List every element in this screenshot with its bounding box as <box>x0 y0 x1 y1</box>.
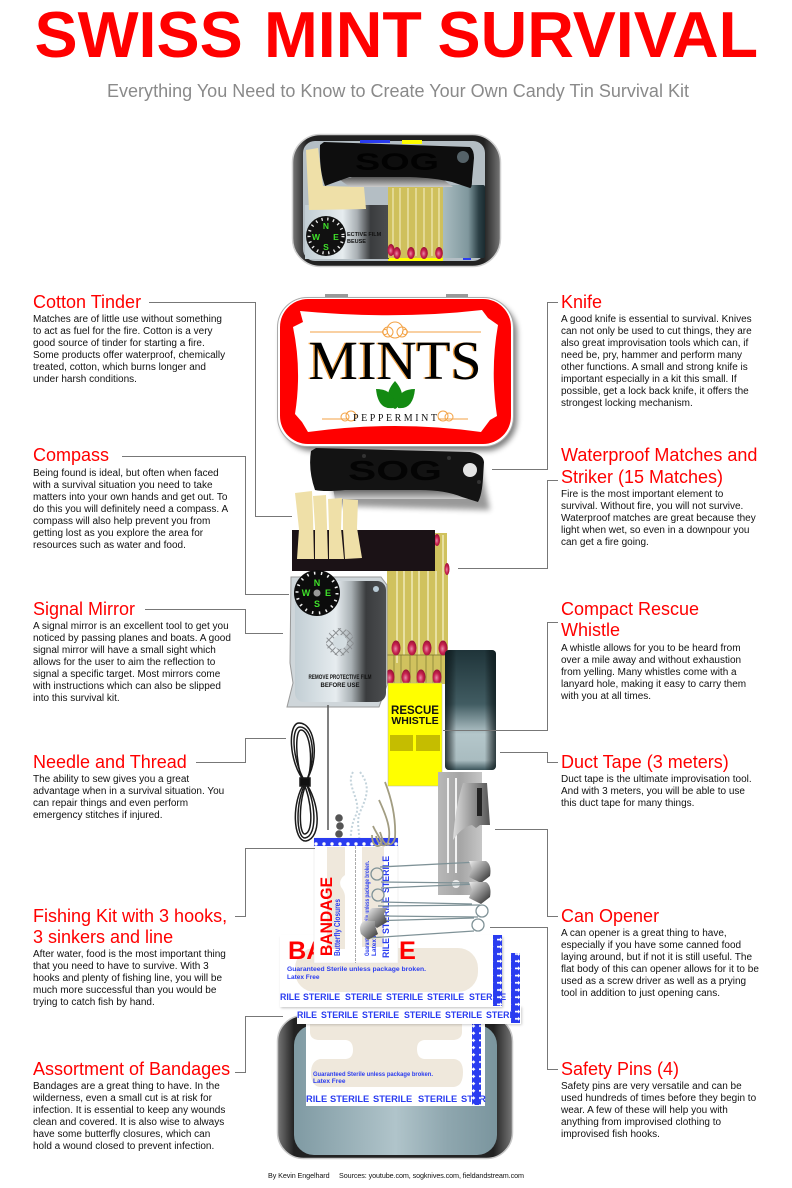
callout: signal mirror: with instructions which can also be slipped <box>32 681 221 692</box>
callout: needle and thread: can repair things and even perform <box>33 798 188 809</box>
red mints tin lid: MINTS <box>308 330 482 391</box>
callout: safety pins: Safety Pins (4) <box>561 1059 679 1079</box>
callout: cotton tinder: to act as fuel for the fire. Cotton is a very <box>33 326 213 337</box>
duct tape roll <box>445 650 496 770</box>
callout: rescue whistle: lanyard hole, making it easy to carry them <box>561 679 746 690</box>
front bandage: RILE <box>280 992 300 1002</box>
bandage inside tin: STERILE <box>330 1094 369 1104</box>
callout: rescue whistle: A whistle allows for you to be heard from <box>561 643 741 654</box>
callout: compass: do this you will definitely need a compass. A <box>33 504 228 515</box>
bandage inside tin: Guaranteed Sterile unless package broken. <box>313 1071 433 1078</box>
callout: compass <box>32 445 289 594</box>
callout: knife: need be, pry, hammer and perform many <box>561 350 742 361</box>
callout: rescue whistle: with you at all times. <box>560 691 651 702</box>
callout: can opener: flat body of this can opener allows for it to be <box>561 964 759 975</box>
front bandage: Latex Free <box>287 974 320 981</box>
callout: fishing kit: Fishing Kit with 3 hooks, <box>33 906 227 926</box>
callout: assortment of bandages: wilderness, even a small cut is at risk for <box>32 1093 213 1104</box>
callout: signal mirror: Signal Mirror <box>33 599 135 619</box>
cotton tinder <box>295 491 362 559</box>
callout: signal mirror: signal a specific target. Most mirrors come <box>33 669 221 680</box>
can opener <box>438 772 490 895</box>
callout: knife: important especially in a kit this small. If <box>561 374 737 385</box>
callout: compass: getting lost as you explore the area for <box>33 528 204 539</box>
rear bandage strip: STERILE <box>362 1010 399 1020</box>
callout: signal mirror: A signal mirror is an excellent tool to get you <box>33 621 229 632</box>
callout: safety pins: anything from improvised clothing to <box>561 1117 722 1128</box>
vertical butterfly bandage: BANDAGE <box>317 877 336 956</box>
bandage inside tin: RILE <box>306 1094 327 1104</box>
subtitle: Everything You Need to Know to Create Your Own Candy Tin Survival Kit <box>107 81 689 101</box>
red mints tin lid <box>278 294 517 451</box>
signal mirror: BEFORE USE <box>320 683 360 689</box>
callout: duct tape: this duct tape for many things. <box>561 798 694 809</box>
callout: signal mirror: signal mirror will have a small sight which <box>33 645 216 656</box>
vertical butterfly bandage: STERILE <box>381 897 391 934</box>
open tin packed with all items: ECTIVE FILM <box>347 232 382 238</box>
callout: compass: Being found is ideal, but often when faced <box>33 468 219 479</box>
callout: cotton tinder: under harsh conditions. <box>33 374 137 385</box>
waterproof matches <box>386 533 450 685</box>
mint leaves <box>376 381 415 409</box>
vertical butterfly bandage <box>314 838 398 963</box>
callout: cotton tinder <box>33 292 292 516</box>
callout: duct tape: Duct Tape (3 meters) <box>561 752 729 772</box>
callout: compass: with a survival situation you need to take <box>32 480 213 491</box>
bandage inside tin <box>306 1020 486 1106</box>
callout: can opener: laying around, but if not it is still useful. The <box>561 952 752 963</box>
red mints tin lid: PEPPERMINT <box>353 413 437 424</box>
rescue whistle package: WHISTLE <box>391 715 439 727</box>
signal mirror: REMOVE PROTECTIVE FILM <box>308 675 372 681</box>
callout: duct tape <box>500 752 752 809</box>
callout: knife: strongest locking mechanism. <box>561 398 693 409</box>
callout: rescue whistle <box>443 599 746 730</box>
compass <box>294 570 340 616</box>
callout: cotton tinder: Some products offer waterproof, chemically <box>33 350 225 361</box>
callout: fishing kit: hooks and plenty of fishing line, you will be <box>33 973 222 984</box>
callout: compass: compass will also help prevent you from <box>33 516 210 527</box>
callout: knife: also great improvisation tools which can, if <box>561 338 749 349</box>
callout: fishing kit: much more successful than you would be <box>33 985 217 996</box>
fish hooks <box>372 782 395 846</box>
callout: can opener: tool in addition to just opening cans. <box>561 988 720 999</box>
rear bandage strip: STERI <box>486 1010 512 1020</box>
vertical butterfly bandage: STERILE <box>381 856 391 893</box>
front bandage: STERILE <box>345 992 382 1002</box>
callout: duct tape: And with 3 meters, you will be able to use <box>561 786 745 797</box>
callout: compass: matters into your own hands and get out. To <box>33 492 228 503</box>
callout: fishing kit <box>33 848 315 1008</box>
callout: assortment of bandages: Assortment of Bandages <box>33 1059 230 1079</box>
sinkers <box>335 814 344 838</box>
title: SWISS <box>34 0 243 71</box>
callout: knife: can not only be used to cut things, they are <box>561 326 752 337</box>
open tin packed with all items: E <box>333 232 339 242</box>
callout: waterproof matches: Waterproof Matches and <box>561 445 757 465</box>
callout: signal mirror: allows for the user to aim the reflection to <box>33 657 216 668</box>
front bandage: STERILE <box>427 992 464 1002</box>
fishing line <box>351 772 367 860</box>
callout: waterproof matches: can get a fire going. <box>561 537 649 548</box>
compass: E <box>325 588 331 598</box>
rescue whistle package: RESCUE <box>391 705 439 717</box>
callout: fishing kit: 3 sinkers and line <box>33 927 173 947</box>
compass: N <box>314 578 320 588</box>
callout: needle and thread: The ability to sew gives you a great <box>33 774 189 785</box>
callout: needle and thread: advantage when in a survival situation. You <box>33 786 224 797</box>
callout: knife: A good knife is essential to survival. Knives <box>561 314 752 325</box>
callout: cotton tinder: good source of tinder for starting a fire. <box>33 338 205 349</box>
vertical butterfly bandage: Latex Free <box>371 923 378 956</box>
red mints tin lid: MINTS <box>307 330 480 391</box>
rear bandage strip: STERILE <box>404 1010 441 1020</box>
callout: rescue whistle: over a mile away and without exhaustion <box>561 655 741 666</box>
callout: rescue whistle: from yelling. Many whistles come with a <box>561 667 737 678</box>
callout: waterproof matches: Waterproof matches are great because they <box>561 513 756 524</box>
callout: safety pins <box>490 928 757 1140</box>
callout: knife: Knife <box>561 292 602 312</box>
callout: rescue whistle: Whistle <box>561 620 620 640</box>
callout: assortment of bandages: hold a wound closed to prevent infection. <box>33 1141 214 1152</box>
callout: safety pins: wear. A few of these will help you with <box>560 1105 728 1116</box>
callout: compass: Compass <box>33 445 109 465</box>
knife <box>310 448 490 510</box>
callout: rescue whistle: Compact Rescue <box>561 599 699 619</box>
title: SURVIVAL <box>438 0 758 71</box>
open tin packed with all items: S <box>323 242 329 252</box>
bandage inside tin: STER <box>461 1094 486 1104</box>
rear bandage strip <box>297 953 522 1025</box>
callout: fishing kit: that you need to have to survive. With 3 <box>33 961 209 972</box>
callout: assortment of bandages: clean and covered. It is also wise to always <box>33 1117 224 1128</box>
callout: signal mirror: noticed by passing planes and boats. A good <box>33 633 231 644</box>
callout: knife <box>492 292 752 470</box>
callout: fishing kit: After water, food is the most important thing <box>33 949 226 960</box>
callout: knife: possible, get a lock back knife, it offers the <box>561 386 749 397</box>
front bandage: STERILE <box>386 992 423 1002</box>
thread <box>291 723 317 841</box>
bandage inside tin: Latex Free <box>313 1078 346 1085</box>
callout: needle and thread: Needle and Thread <box>33 752 187 772</box>
callout: waterproof matches: light when wet, so even in a downpour you <box>561 525 749 536</box>
callout: fishing kit: trying to catch fish by hand. <box>33 997 155 1008</box>
front bandage: BANDAGE <box>288 937 416 965</box>
front bandage: Guaranteed Sterile unless package broken. <box>287 966 426 973</box>
safety pins <box>360 861 490 940</box>
front bandage: STERILE <box>303 992 340 1002</box>
callout: waterproof matches <box>458 445 757 568</box>
lid label <box>293 310 498 432</box>
rear bandage strip: STERILE <box>445 1010 482 1020</box>
callout: cotton tinder: Matches are of little use without something <box>33 314 222 325</box>
callout: knife: other functions. A small and strong knife is <box>561 362 748 373</box>
callout: assortment of bandages: infection. It is essential to keep any wounds <box>33 1105 225 1116</box>
callout: can opener <box>495 830 759 999</box>
front bandage: STERILE <box>469 992 506 1002</box>
callout: waterproof matches: Striker (15 Matches) <box>561 467 723 487</box>
callout: signal mirror: into this survival kit. <box>33 693 120 704</box>
front bandage <box>280 935 506 1008</box>
vertical butterfly bandage: RILE <box>381 938 391 958</box>
callout: needle and thread: emergency stitches if injured. <box>33 810 163 821</box>
callout: safety pins: Safety pins are very versatile and can be <box>561 1081 742 1092</box>
bottom tin <box>278 1016 512 1158</box>
callout: signal mirror <box>32 599 283 704</box>
rear bandage strip: RILE <box>297 1010 317 1020</box>
rear bandage strip: STERILE <box>321 1010 358 1020</box>
open tin packed with all items: SOG <box>355 149 439 176</box>
open tin packed with all items <box>292 134 500 266</box>
footer credits: By Kevin Engelhard Sources: youtube.com, sogknives.com, fieldandstream.com <box>268 1171 524 1180</box>
compass: W <box>302 588 311 598</box>
callout: can opener: Can Opener <box>561 906 659 926</box>
callout: waterproof matches: Fire is the most important element to <box>561 489 724 500</box>
callout: compass: resources such as water and food. <box>33 540 186 551</box>
bandage inside tin: STERILE <box>418 1094 457 1104</box>
callout: needle and thread <box>33 738 286 821</box>
callout: can opener: used as a screw driver as well as a prying <box>561 976 746 987</box>
callout: duct tape: Duct tape is the ultimate improvisation tool. <box>561 774 752 785</box>
rescue whistle package <box>388 683 442 786</box>
open tin packed with all items: BEUSE <box>347 239 366 245</box>
open tin packed with all items: W <box>312 232 321 242</box>
callout: can opener: A can opener is a great thing to have, <box>561 928 727 939</box>
compass: S <box>314 599 320 609</box>
needle <box>327 705 329 830</box>
callout: cotton tinder: Cotton Tinder <box>33 292 141 312</box>
callout: safety pins: used hundreds of times before they begin to <box>561 1093 757 1104</box>
callout: assortment of bandages: have some butterfly closures, which can <box>33 1129 210 1140</box>
open tin packed with all items: N <box>323 221 329 231</box>
callout: assortment of bandages: Bandages are a great thing to have. In the <box>33 1081 220 1092</box>
callout: waterproof matches: survival. Without fire, you will not survive. <box>561 501 743 512</box>
striker strip <box>292 530 435 571</box>
knife: SOG <box>348 455 442 486</box>
callout: cotton tinder: treated, cotton, which burns longer and <box>33 362 206 373</box>
callout: safety pins: improvised fish hooks. <box>561 1129 660 1140</box>
signal mirror <box>287 577 387 707</box>
callout: can opener: especially if you have some canned food <box>561 940 741 951</box>
callout: assortment of bandages <box>32 1016 283 1152</box>
title: MINT <box>264 0 422 71</box>
vertical butterfly bandage: Butterfly Closures <box>333 899 342 956</box>
bandage inside tin: STERILE <box>373 1094 412 1104</box>
vertical butterfly bandage: Guaranteed Sterile unless package broken. <box>364 861 371 956</box>
